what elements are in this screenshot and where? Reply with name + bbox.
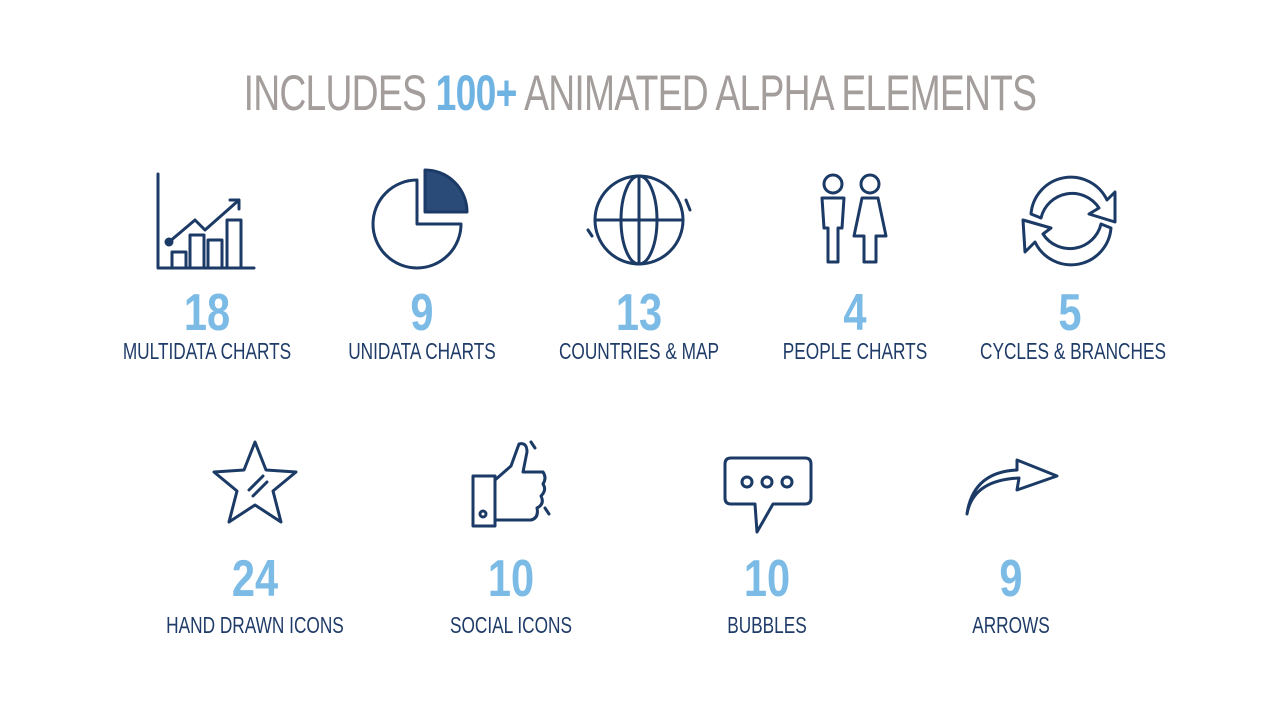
item: unidata charts: UNIDATA CHARTS	[348, 338, 496, 364]
title: INCLUDES 100+ ANIMATED ALPHA ELEMENTS	[244, 65, 1036, 121]
icon: thumbs up	[472, 440, 551, 528]
item: social icons	[450, 440, 572, 638]
item: arrows: 9	[999, 550, 1023, 608]
item: hand drawn icons	[166, 440, 344, 638]
item: cycles: 5	[1058, 284, 1082, 342]
item: bubbles	[724, 456, 812, 638]
icon: bar chart	[156, 172, 256, 270]
item: hand drawn icons: 24	[232, 550, 278, 608]
icon: cycle arrows	[1022, 176, 1116, 266]
item: people	[783, 174, 927, 364]
icon: pie chart	[372, 168, 468, 270]
item: unidata charts: 9	[410, 284, 434, 342]
item: people: PEOPLE CHARTS	[783, 338, 927, 364]
icon: speech bubble	[724, 456, 812, 534]
item: multidata charts	[123, 172, 291, 364]
item: countries	[559, 174, 719, 364]
item: social icons: SOCIAL ICONS	[450, 612, 572, 638]
item: hand drawn icons: HAND DRAWN ICONS	[166, 612, 344, 638]
number: 18	[184, 284, 230, 342]
item: people: 4	[843, 284, 867, 342]
icon: curved arrow	[966, 458, 1058, 516]
item: arrows	[966, 458, 1058, 638]
item: countries: 13	[616, 284, 662, 342]
item: bubbles: 10	[744, 550, 790, 608]
label: MULTIDATA CHARTS	[123, 338, 291, 364]
icon: people	[820, 174, 888, 264]
item: cycles: CYCLES & BRANCHES	[980, 338, 1166, 364]
icon: star	[212, 440, 298, 524]
item: countries: COUNTRIES & MAP	[559, 338, 719, 364]
item: cycles	[980, 176, 1166, 364]
item: bubbles: BUBBLES	[727, 612, 807, 638]
icon: globe	[586, 174, 692, 266]
item: arrows: ARROWS	[972, 612, 1050, 638]
item: social icons: 10	[488, 550, 534, 608]
item: unidata charts	[348, 168, 496, 364]
